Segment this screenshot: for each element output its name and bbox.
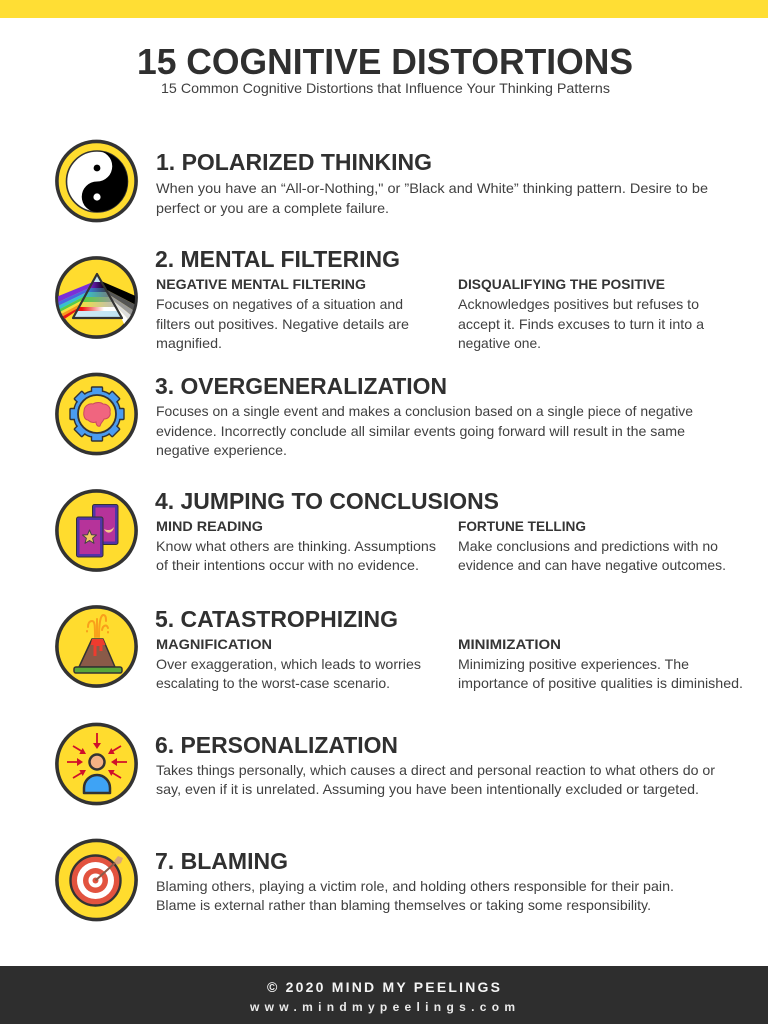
column: negative mental filtering: NEGATIVE MENTAL FILTERING bbox=[156, 276, 366, 292]
column: fortune telling: evidence and can have negative outcomes. bbox=[458, 558, 726, 573]
icon: person with arrows bbox=[57, 724, 136, 804]
panel: 3 overgeneralization bbox=[57, 373, 693, 458]
description: Focuses on a single event and makes a conclusion based on a single piece of negative bbox=[156, 404, 693, 419]
column: mind reading bbox=[156, 518, 436, 573]
description: Blaming others, playing a victim role, and holding others responsible for their pain. bbox=[156, 879, 674, 894]
footer copyright: © 2020 MIND MY PEELINGS bbox=[267, 979, 500, 995]
column: magnification: Over exaggeration, which leads to worries bbox=[156, 657, 421, 672]
title: 15 COGNITIVE DISTORTIONS bbox=[137, 41, 633, 82]
heading: 3. OVERGENERALIZATION bbox=[155, 373, 447, 399]
panel: 4 jumping to conclusions bbox=[57, 488, 726, 573]
heading: 4. JUMPING TO CONCLUSIONS bbox=[155, 488, 499, 514]
icon: target with arrow bbox=[57, 840, 136, 920]
description: say, even if it is unrelated. Assuming you have been intentionally excluded or targeted. bbox=[156, 782, 699, 797]
heading: 2. MENTAL FILTERING bbox=[155, 246, 400, 272]
icon: tarot cards bbox=[57, 491, 136, 570]
subtitle: 15 Common Cognitive Distortions that Influence Your Thinking Patterns bbox=[161, 81, 610, 96]
column: negative mental filtering: magnified. bbox=[156, 336, 222, 351]
column: negative mental filtering: filters out positives. Negative details are bbox=[156, 317, 409, 332]
column: magnification: MAGNIFICATION bbox=[156, 636, 272, 652]
column: fortune telling: Make conclusions and predictions with no bbox=[458, 539, 718, 554]
column: mind reading: MIND READING bbox=[156, 518, 263, 534]
description bbox=[156, 404, 693, 458]
column: mind reading: Know what others are thinking. Assumptions bbox=[156, 539, 436, 554]
column: fortune telling: FORTUNE TELLING bbox=[458, 518, 586, 534]
column: magnification bbox=[156, 636, 421, 691]
description bbox=[156, 763, 715, 797]
column: disqualifying the positive: Acknowledges positives but refuses to bbox=[458, 297, 699, 312]
panel: 2 mental filtering bbox=[56, 246, 704, 351]
column: minimization: importance of positive qualities is diminished. bbox=[458, 676, 743, 691]
column: mind reading: of their intentions occur with no evidence. bbox=[156, 558, 419, 573]
heading: 7. BLAMING bbox=[155, 848, 288, 874]
icon: volcano bbox=[57, 607, 136, 686]
panel: 6 personalization bbox=[57, 724, 715, 804]
column: disqualifying the positive: accept it. Finds excuses to turn it into a bbox=[458, 317, 704, 332]
panel: 7 blaming bbox=[57, 840, 674, 920]
column: fortune telling bbox=[458, 518, 726, 573]
column: negative mental filtering: Focuses on negatives of a situation and bbox=[156, 297, 403, 312]
panel: 1 polarized thinking bbox=[57, 141, 708, 221]
description: negative experience. bbox=[156, 443, 287, 458]
description: Blame is external rather than blaming themselves or taking some responsibility. bbox=[156, 898, 651, 913]
column: magnification: escalating to the worst-case scenario. bbox=[156, 676, 390, 691]
description: evidence. Incorrectly conclude all similar events going forward will result in the same bbox=[156, 424, 685, 439]
heading: 5. CATASTROPHIZING bbox=[155, 606, 398, 632]
footer bbox=[0, 966, 768, 1024]
description bbox=[156, 181, 708, 216]
icon: brain in gear bbox=[57, 374, 136, 454]
column: disqualifying the positive: negative one. bbox=[458, 336, 541, 351]
icon: yin yang bbox=[57, 141, 136, 221]
heading: 1. POLARIZED THINKING bbox=[156, 149, 432, 175]
icon: prism bbox=[56, 258, 138, 337]
heading: 6. PERSONALIZATION bbox=[155, 732, 398, 758]
description bbox=[156, 879, 674, 913]
footer url: www.mindmypeelings.com bbox=[249, 1000, 515, 1014]
column: minimization: Minimizing positive experiences. The bbox=[458, 657, 689, 672]
panel: 5 catastrophizing bbox=[57, 606, 743, 691]
column: disqualifying the positive bbox=[458, 276, 704, 351]
column: minimization: MINIMIZATION bbox=[458, 636, 561, 652]
description: Takes things personally, which causes a direct and personal reaction to what others do or bbox=[156, 763, 715, 778]
column: negative mental filtering bbox=[156, 276, 409, 351]
top yellow band bbox=[0, 0, 768, 18]
description: perfect or you are a complete failure. bbox=[156, 201, 389, 216]
column: minimization bbox=[458, 636, 743, 691]
description: When you have an “All-or-Nothing," or ”Black and White” thinking pattern. Desire to be bbox=[156, 181, 708, 196]
column: disqualifying the positive: DISQUALIFYING THE POSITIVE bbox=[458, 276, 665, 292]
